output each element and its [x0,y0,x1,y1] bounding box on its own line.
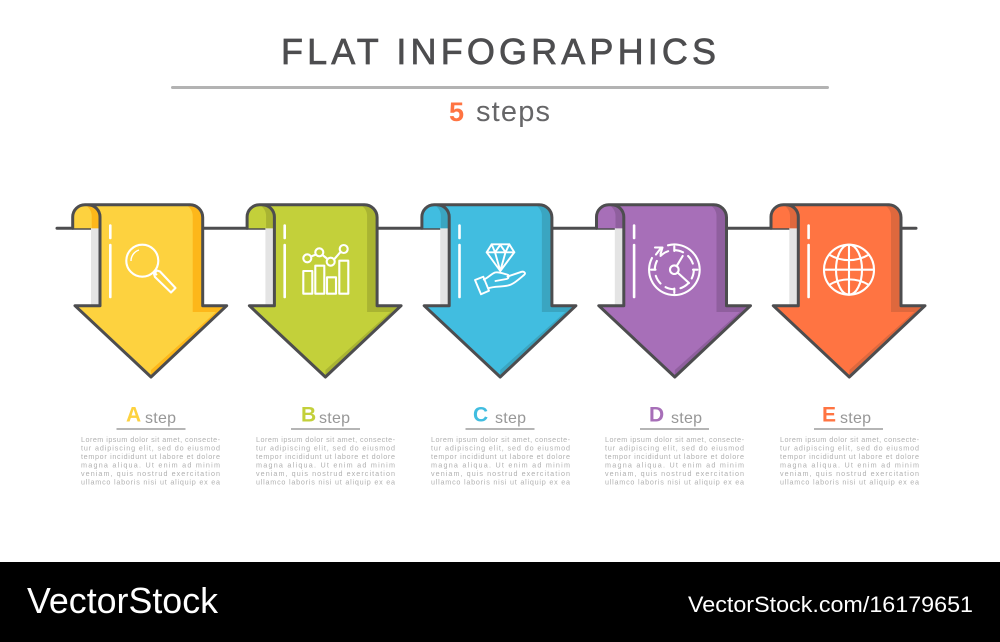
description B [256,435,396,486]
description B: magna aliqua. Ut enim ad minim [256,460,395,470]
arrow: orange [771,205,925,377]
step label A [116,404,186,430]
description B: veniam, quis nostrud exercitation [256,469,395,478]
description A: tempor incididunt ut labore et dolore [81,452,220,461]
description C: tur adipiscing elit, sed do eiusmod [431,444,570,452]
description D: tur adipiscing elit, sed do eiusmod [605,444,744,452]
step label B: step [319,410,350,427]
description A [81,435,221,486]
description A: tur adipiscing elit, sed do eiusmod [81,444,220,452]
title divider [171,86,829,89]
step label D: D [649,404,664,427]
step label D: step [671,410,702,427]
description E [780,435,920,486]
panel: step B [247,205,401,486]
step label D [640,404,709,430]
subtitle: 5 [449,97,464,127]
description E: tur adipiscing elit, sed do eiusmod [780,444,919,452]
description A: magna aliqua. Ut enim ad minim [81,460,220,470]
description A: Lorem ipsum dolor sit amet, consecte- [81,435,221,444]
description B: ullamco laboris nisi ut aliquip ex ea [256,478,395,486]
description C [431,435,571,486]
footer brand: VectorStock [27,580,219,621]
step label B [291,404,360,430]
description E: veniam, quis nostrud exercitation [780,469,919,478]
step label A: A [126,404,141,427]
description E: magna aliqua. Ut enim ad minim [780,460,919,470]
panel: step C [422,205,576,486]
description C: veniam, quis nostrud exercitation [431,469,570,478]
description A: veniam, quis nostrud exercitation [81,469,220,478]
title: FLAT INFOGRAPHICS [281,31,716,72]
step label C [466,404,534,430]
description D: ullamco laboris nisi ut aliquip ex ea [605,478,744,486]
icon: globe [824,245,874,295]
arrow: purple [596,205,750,377]
description C: tempor incididunt ut labore et dolore [431,452,570,461]
panel: step E [771,205,925,486]
arrow: green [247,205,401,377]
description D: veniam, quis nostrud exercitation [605,469,744,478]
description B: tur adipiscing elit, sed do eiusmod [256,444,395,452]
description B: tempor incididunt ut labore et dolore [256,452,395,461]
description C: Lorem ipsum dolor sit amet, consecte- [431,435,571,444]
footer image url: VectorStock.com/16179651 [688,592,973,617]
description D: magna aliqua. Ut enim ad minim [605,460,744,470]
description D [605,435,745,486]
step label E [814,404,883,430]
description B: Lorem ipsum dolor sit amet, consecte- [256,435,396,444]
footer bar [0,562,1000,642]
description D: tempor incididunt ut labore et dolore [605,452,744,461]
description E: tempor incididunt ut labore et dolore [780,452,919,461]
arrow: blue [422,205,576,377]
panel: step D [596,205,750,486]
step label E: E [822,404,836,427]
step label B: B [301,404,316,427]
description E: Lorem ipsum dolor sit amet, consecte- [780,435,920,444]
step label E: step [840,410,871,427]
description A: ullamco laboris nisi ut aliquip ex ea [81,478,220,486]
icon: diamond over open hand [475,244,525,294]
step label C: C [473,404,488,427]
panel: step A [73,205,227,486]
description C: ullamco laboris nisi ut aliquip ex ea [431,478,570,486]
step label A: step [145,410,176,427]
icon: bar chart with trend line [303,245,348,294]
connecting rope [57,227,916,230]
subtitle: steps [476,96,550,128]
step label C: step [495,410,526,427]
arrow: yellow [73,205,227,377]
description C: magna aliqua. Ut enim ad minim [431,460,570,470]
icon: magnifying glass [126,245,176,292]
description E: ullamco laboris nisi ut aliquip ex ea [780,478,919,486]
icon: clock with circular arrow [649,244,700,295]
description D: Lorem ipsum dolor sit amet, consecte- [605,435,745,444]
